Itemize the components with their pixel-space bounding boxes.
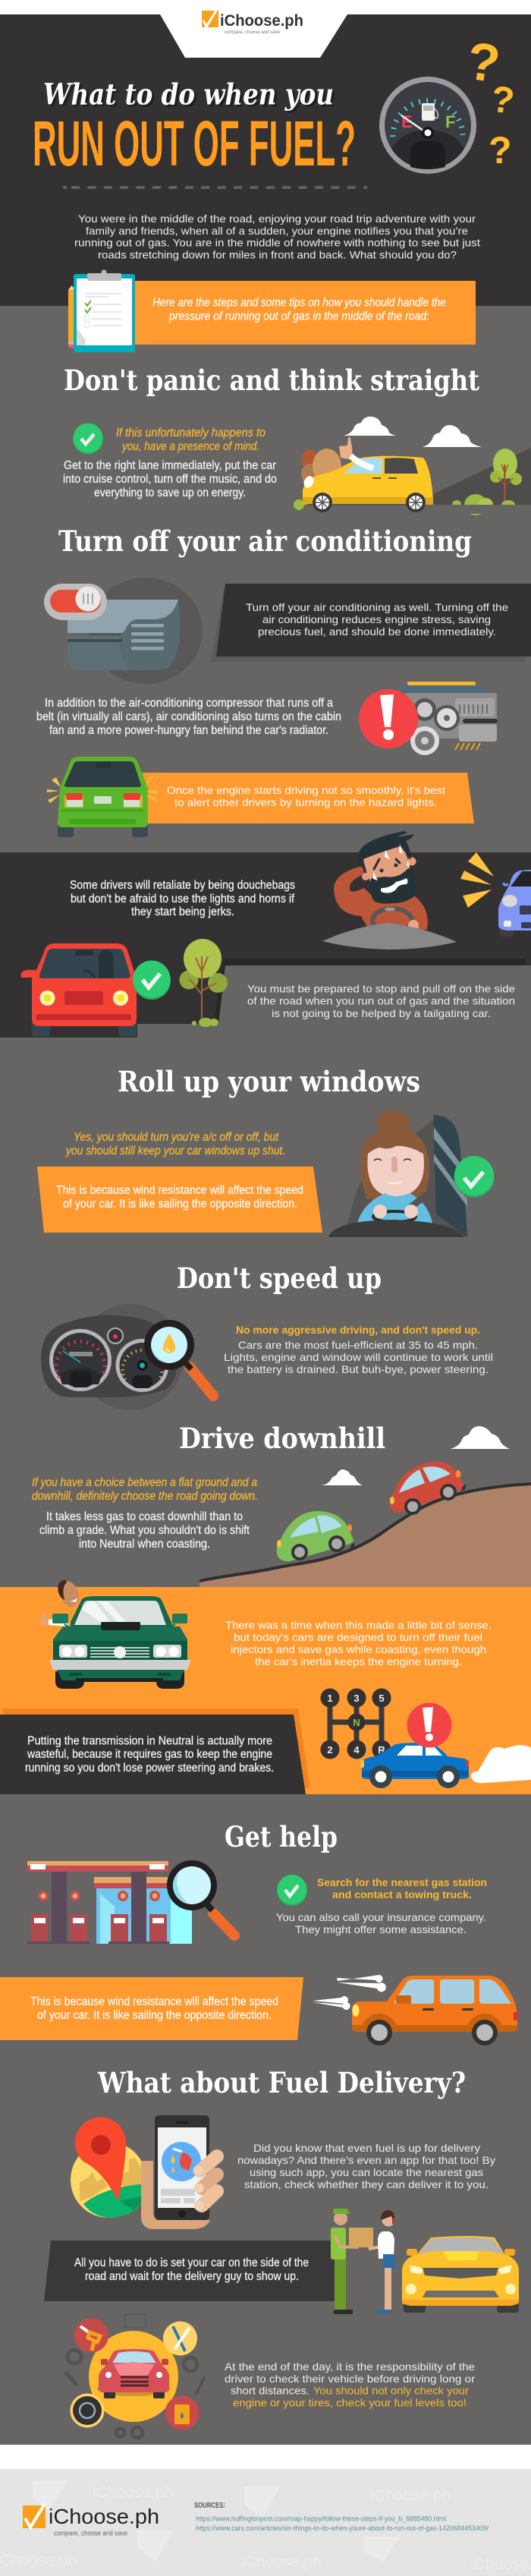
illustration: man and green car bbox=[40, 1580, 191, 1689]
sources: SOURCES: bbox=[194, 2502, 225, 2510]
yellow callout: downhill bbox=[32, 1476, 258, 1503]
orange banner: hazard lights: to alert other drivers by turning on the hazard lights. bbox=[174, 797, 437, 808]
orange banner: wind resistance bbox=[0, 1977, 303, 2040]
dark panel: turn off AC: precious fuel, and should be done immediately. bbox=[258, 626, 496, 638]
text: compressor: In addition to the air-conditioning compressor that runs off a bbox=[45, 697, 333, 710]
illustration: tree bbox=[179, 939, 228, 1027]
text: pull off: You must be prepared to stop and pull off on the side bbox=[247, 984, 515, 994]
text: end of the day: At the end of the day, it is the responsibility of the bbox=[225, 2361, 475, 2373]
text: don't speed up bbox=[224, 1324, 493, 1375]
icon: cloud bbox=[450, 1426, 510, 1449]
dark panel: turn off AC: air conditioning reduces engine stress, saving bbox=[262, 614, 491, 625]
title line 1: What to do when you bbox=[43, 77, 334, 111]
footer: iChoose.ph bbox=[370, 2486, 451, 2504]
icon: gear shift: 5 bbox=[379, 1693, 385, 1704]
orange intro banner bbox=[135, 281, 476, 345]
text: coasting: It takes less gas to coast downhill than to bbox=[46, 1510, 243, 1523]
text: get to the right lane: Get to the right lane immediately, put the car bbox=[64, 459, 276, 472]
icon: question marks bbox=[463, 30, 517, 172]
illustration: red car front bbox=[21, 943, 137, 1037]
yellow callout: presence of mind bbox=[116, 427, 266, 453]
illustration: blue car with smoke bbox=[360, 1743, 531, 1788]
dark panel: neutral bbox=[0, 1708, 309, 1794]
intro text: roads stretching down for miles in front and back. What should you do? bbox=[98, 249, 457, 261]
intro text: You were in the middle of the road, enjoying your road trip adventure with your bbox=[78, 213, 476, 225]
heading: drive downhill: Drive downhill bbox=[179, 1422, 385, 1455]
text: pull off: is not going to be helped by a tailgating car. bbox=[272, 1008, 491, 1019]
dashed divider bbox=[63, 186, 371, 189]
heading: fuel delivery: What about Fuel Delivery? bbox=[97, 2066, 466, 2099]
icon: gear shift bbox=[320, 1688, 391, 1759]
footer: iChoose.ph bbox=[93, 2483, 173, 2501]
dark panel: wait for delivery bbox=[44, 2241, 335, 2301]
icon: question marks: ? bbox=[463, 30, 504, 94]
yellow callout: keep windows up bbox=[65, 1131, 285, 1157]
text: end of the day: short distances. bbox=[231, 2385, 309, 2397]
text: some drivers bbox=[70, 879, 295, 918]
icon: yellow rays bbox=[460, 852, 494, 908]
icon: gear shift: 4 bbox=[353, 1744, 360, 1756]
text: don't speed up: Cars are the most fuel-efficient at 35 to 45 mph. bbox=[238, 1340, 478, 1351]
text: coasting bbox=[39, 1510, 250, 1551]
dark panel: wait for delivery: All you have to do is set your car on the side of the bbox=[74, 2256, 309, 2269]
dark panel: wait for delivery: road and wait for the delivery guy to show up. bbox=[85, 2270, 299, 2283]
illustration: blue car bbox=[498, 870, 531, 937]
footer logo: compare, choose and save bbox=[54, 2529, 127, 2537]
orange banner: hazard lights: Once the engine starts driving not so smoothly, it's best bbox=[167, 785, 445, 796]
illustration: car maintenance cluster bbox=[65, 2314, 205, 2438]
heading: roll up: Roll up your windows bbox=[118, 1065, 420, 1098]
logo: compare, choose and save bbox=[225, 30, 281, 35]
title line 1: What to do when you bbox=[46, 79, 336, 113]
icon: question marks: ? bbox=[489, 129, 512, 172]
illustration: delivery people bbox=[331, 2209, 395, 2314]
text: some drivers: they start being jerks. bbox=[131, 905, 234, 918]
icon: engine with alert bbox=[359, 682, 498, 755]
sources: https://www.cars.com/articles/six-things-to-do-when-youre-about-to-run-out-of-gas-1420684453409/ bbox=[196, 2524, 489, 2533]
text: did you know: station, check whether they can deliver it to you. bbox=[244, 2179, 489, 2190]
text: fuel injectors: the car's inertia keeps the engine turning. bbox=[255, 1656, 462, 1667]
text: compressor: fan and a more power-hungry fan behind the car's radiator. bbox=[49, 724, 328, 737]
orange banner: hazard lights bbox=[143, 773, 474, 824]
text: end of the day: You should not only check your bbox=[313, 2385, 470, 2397]
text: did you know: nowadays? And there’s even an app for that too! By bbox=[237, 2155, 495, 2166]
dark header panel bbox=[0, 14, 531, 306]
intro text: running out of gas. You are in the middle of nowhere with nothing to see but just bbox=[74, 237, 480, 249]
footer bbox=[0, 2469, 531, 2576]
icon: fuel gauge: E bbox=[401, 112, 413, 131]
dark band section bbox=[0, 852, 531, 1038]
dark panel: neutral: wasteful, because it requires gas to keep the engine bbox=[27, 1748, 272, 1761]
text: fuel injectors: but today's cars are designed to turn off their fuel bbox=[234, 1632, 482, 1643]
heading: don't speed up: Don't speed up bbox=[177, 1261, 382, 1295]
orange banner: wind resistance: This is because wind resistance will affect the speed bbox=[30, 1995, 278, 2008]
illustration: hill road bbox=[200, 1484, 531, 1588]
sources: https://www.huffingtonpost.com/map-happy/follow-these-steps-if-you_b_8885480.html bbox=[196, 2515, 446, 2523]
illustration: red car on hill bbox=[389, 1462, 467, 1515]
text: compressor bbox=[36, 697, 341, 737]
illustration: angry driver bbox=[322, 831, 457, 949]
icon: gear shift: 2 bbox=[327, 1744, 333, 1756]
icon: gear shift: 1 bbox=[327, 1693, 333, 1704]
text: get to the right lane: into cruise control, turn off the music, and do bbox=[63, 473, 277, 486]
orange intro banner: Here are the steps and some tips on how you should handle the bbox=[152, 296, 446, 310]
yellow callout: keep windows up: you should still keep your car windows up shut. bbox=[65, 1145, 285, 1157]
illustration: yellow car with thumbs up bbox=[301, 437, 433, 512]
icon: clipboard and pencil bbox=[68, 270, 135, 352]
text: did you know: Did you know that even fuel is up for delivery bbox=[253, 2143, 480, 2154]
text: fuel injectors: injectors and save gas while coasting, even though bbox=[231, 1644, 486, 1655]
logo: iChoose.ph bbox=[220, 12, 303, 30]
icon: cloud small bbox=[322, 1469, 363, 1485]
illustration: green car with hazard lights bbox=[47, 757, 157, 837]
logo bbox=[202, 11, 303, 35]
heading: don't panic: Don't panic and think straight bbox=[64, 364, 479, 397]
orange band bbox=[0, 1587, 531, 1794]
text: search nearest gas station: You can also call your insurance company. bbox=[276, 1912, 486, 1923]
illustration: phone in hand bbox=[141, 2115, 217, 2229]
orange banner: wind resistance bbox=[37, 1167, 322, 1233]
icon: magnifier bbox=[167, 1860, 234, 1935]
text: did you know: using such app, you can locate the nearest gas bbox=[250, 2167, 483, 2178]
icon: fuel gauge: F bbox=[445, 112, 455, 131]
dark panel: turn off AC bbox=[211, 584, 531, 662]
text: search nearest gas station: and contact a towing truck. bbox=[332, 1889, 472, 1901]
footer logo bbox=[23, 2504, 159, 2537]
icon: alert bbox=[407, 1703, 452, 1747]
illustration: woman driver bbox=[328, 1110, 467, 1237]
text: fuel injectors bbox=[225, 1620, 492, 1667]
illustration: green car on hill bbox=[277, 1511, 355, 1561]
dark panel: turn off AC: Turn off your air conditioning as well. Turning off the bbox=[246, 602, 508, 613]
text: end of the day: engine or your tires, check your fuel levels too! bbox=[233, 2397, 467, 2409]
illustration: yellow car front bbox=[402, 2236, 519, 2313]
heading: air conditioning: Turn off your air conditioning bbox=[58, 524, 472, 558]
text: pull off bbox=[247, 984, 515, 1019]
icon: air conditioner with toggle bbox=[44, 578, 203, 684]
dark panel: neutral: running so you don't lose power steering and brakes. bbox=[25, 1762, 274, 1775]
orange banner: wind resistance: This is because wind resistance will affect the speed bbox=[56, 1184, 303, 1197]
yellow callout: downhill: If you have a choice between a flat ground and a bbox=[32, 1476, 257, 1489]
text: end of the day bbox=[225, 2361, 476, 2409]
footer: iChoose.ph bbox=[241, 2553, 322, 2571]
text: search nearest gas station: They might offer some assistance. bbox=[295, 1924, 467, 1935]
illustration: dashboard and magnifier bbox=[41, 1304, 213, 1410]
text: don't speed up: the battery is drained. But buh-bye, power steering. bbox=[228, 1364, 489, 1375]
dark panel: neutral: Putting the transmission in Neutral is actually more bbox=[27, 1735, 272, 1747]
illustration: hillside with clouds and tree bbox=[294, 417, 531, 515]
text: search nearest gas station: Search for the nearest gas station bbox=[317, 1877, 487, 1888]
footer logo: iChoose.ph bbox=[49, 2505, 159, 2528]
illustration: map pin bbox=[71, 2118, 146, 2218]
heading: get help: Get help bbox=[225, 1820, 338, 1853]
text: don't speed up: Lights, engine and window will continue to work until bbox=[224, 1352, 493, 1363]
icon: gear shift: R bbox=[378, 1744, 385, 1756]
icon: check badge bbox=[454, 1156, 495, 1198]
text: get to the right lane: everything to save up on energy. bbox=[94, 487, 246, 499]
yellow callout: presence of mind: you, have a presence of mind. bbox=[121, 440, 259, 453]
icon: check badge bbox=[133, 961, 171, 1000]
text: end of the day: driver to check their vehicle before driving long or bbox=[225, 2373, 476, 2385]
illustration: speeding orange van bbox=[313, 1975, 517, 2045]
text: coasting: into Neutral when coasting. bbox=[79, 1538, 210, 1551]
sources bbox=[194, 2502, 489, 2533]
icon: question marks: ? bbox=[489, 78, 517, 122]
text: pull off: of the road when you run out of gas and the situation bbox=[247, 996, 515, 1006]
icon: check badge bbox=[277, 1875, 307, 1906]
icon: gear shift: N bbox=[353, 1717, 360, 1728]
text: don't speed up: No more aggressive driving, and don't speed up. bbox=[236, 1324, 480, 1336]
intro text: family and friends, when all of a sudden, your engine notifies you that you’re bbox=[86, 225, 468, 237]
yellow callout: downhill: downhill, definitely choose the road going down. bbox=[32, 1490, 258, 1503]
illustration: gas station bbox=[27, 1861, 192, 1944]
icon: fuel gauge bbox=[379, 77, 476, 174]
orange banner: wind resistance: of your car. It is like sailing the opposite direction. bbox=[63, 1198, 297, 1211]
icon: gear shift: 3 bbox=[353, 1693, 360, 1704]
text: coasting: climb a grade. What you shouldn't do is shift bbox=[39, 1524, 250, 1537]
icon: check badge bbox=[73, 424, 103, 454]
text: did you know bbox=[237, 2143, 495, 2190]
text: search nearest gas station bbox=[276, 1877, 487, 1935]
intro text bbox=[74, 213, 480, 261]
orange banner: wind resistance: of your car. It is like sailing the opposite direction. bbox=[37, 2009, 272, 2022]
text: compressor: belt (in virtually all cars), air conditioning also turns on the cabin bbox=[36, 710, 341, 723]
text: some drivers: Some drivers will retaliate by being douchebags bbox=[70, 879, 295, 892]
text: get to the right lane bbox=[63, 459, 277, 499]
orange intro banner: pressure of running out of gas in the middle of the road: bbox=[168, 310, 429, 323]
text: fuel injectors: There was a time when this made a little bit of sense, bbox=[225, 1620, 492, 1631]
yellow callout: presence of mind: If this unfortunately happens to bbox=[116, 427, 266, 439]
yellow callout: keep windows up: Yes, you should turn you're a/c off or off, but bbox=[74, 1131, 279, 1144]
text: some drivers: but don't be afraid to use the lights and horns if bbox=[71, 893, 295, 905]
